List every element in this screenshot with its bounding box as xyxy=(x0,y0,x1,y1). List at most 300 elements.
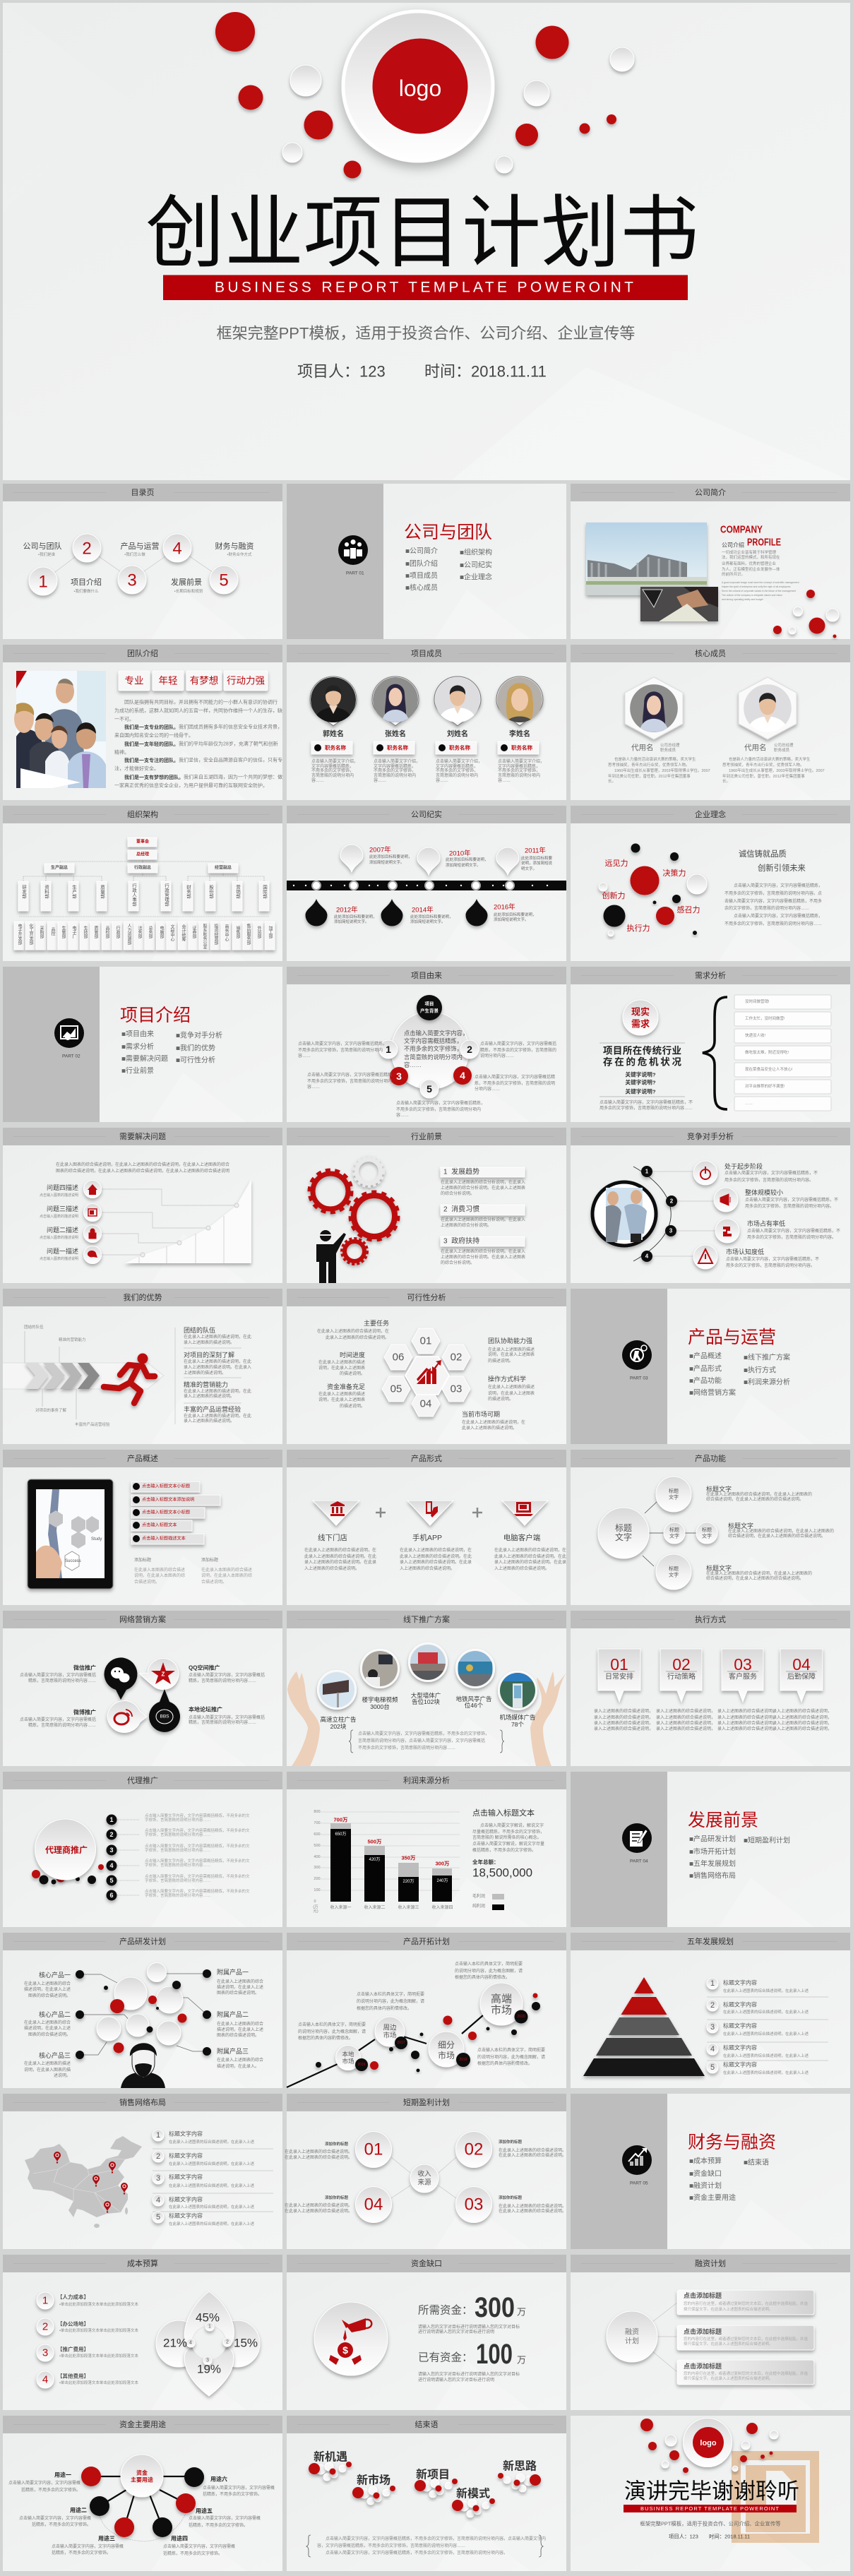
keywords xyxy=(314,2450,537,2500)
panel: agent promotion: 点击输入简要文字内容，文字内容需概括精炼，不用多余的文 xyxy=(145,1843,250,1849)
list bars: 点击输入标题文本 xyxy=(142,1522,177,1528)
panel: agent promotion: 代理推广 xyxy=(127,1775,158,1785)
panel: profit source analysis: 点击输入标题文本 xyxy=(472,1808,535,1818)
descriptions: 点击输入简要文字介绍， xyxy=(436,758,482,764)
badges: 职务名称 xyxy=(325,744,346,751)
photo: hand and tablet xyxy=(640,587,718,621)
panel: main uses of funds: 用途三 xyxy=(98,2535,115,2542)
numbered nodes: 6 xyxy=(109,1892,114,1899)
panel: demand analysis: 关键字说明? xyxy=(625,1079,656,1086)
panel: industry outlook: 上述图表的综合分析说明。在此录入上述图表 xyxy=(441,1254,525,1260)
top boxes xyxy=(44,837,238,873)
panel: project origin: 分项内容…… xyxy=(475,1086,500,1092)
bar chart: 650万 xyxy=(335,1832,347,1837)
top boxes: 行政副总 xyxy=(134,864,151,870)
dots over watermark xyxy=(732,2452,773,2471)
panel: feasibility analysis: 说明，在此录入上述图表 xyxy=(318,1365,365,1371)
panel: product overview xyxy=(3,1450,282,1605)
panel: competitor analysis: 用多余的文字修饰，言简意赅的说明分项内容。 xyxy=(724,1177,813,1183)
panel: feasibility analysis: 团队协助能力强 xyxy=(488,1337,532,1344)
panel: project origin: 点击输入简要文字内容，文字内容需概括精炼 xyxy=(307,1072,392,1078)
panel: part 04 section xyxy=(571,1772,850,1927)
discs: 收入 xyxy=(417,2169,431,2178)
panel: product development plan: 在此录入上述图表的综合 xyxy=(217,2021,263,2027)
panel: industry outlook: 上述图表的综合分析说明。 xyxy=(441,1222,491,1228)
panel: funding gap: 请输入您的文字对目标进行说明请输入您的文字对目标 xyxy=(418,2371,520,2377)
chevrons xyxy=(25,1363,100,1389)
hands xyxy=(287,1671,566,1766)
panel: sales network map xyxy=(3,2094,282,2249)
panel: our advantages: 在此录入上述图表的描述说明，在此 xyxy=(184,1359,251,1364)
list: 标题文字内容 xyxy=(723,2001,757,2008)
panel: company timeline: 此处添加目标和要说明， xyxy=(494,912,537,917)
panel: part 03 section: ■利润来源分析 xyxy=(744,1377,790,1387)
central disc: 计划 xyxy=(625,2336,639,2346)
panel: main uses of funds: 用途二 xyxy=(70,2507,87,2514)
list: 在此录入上述图表的综合描述说明，在此录入上述 xyxy=(169,2161,255,2166)
descriptions: 言简意赅的说明分项内 xyxy=(374,773,416,778)
panel: offline promotion: 言简意赅的说明分项内容，点击输入简要文字内容，文字内容需概括 xyxy=(358,1738,485,1743)
panel: closing remarks: 容，文字内容需概括精炼，不用多余的文字修饰，言简意赅的说明分项内容…… xyxy=(317,2543,465,2548)
panel: company timeline: 此处添加目标和要 xyxy=(521,855,553,861)
panel: project origin: 点击输入简要文字内容，文字内容需概括精炼， xyxy=(298,1041,387,1046)
list: 标题文字内容 xyxy=(169,2130,203,2137)
panel: project origin: 不用多余的文字修饰，言简意赅的说明分项内 xyxy=(396,1107,481,1112)
panel: project origin: 项目 xyxy=(425,1001,434,1007)
sub-department boxes: 会计统筹 xyxy=(181,924,186,941)
panel: agent promotion: 点击输入简要文字内容，文字内容需概括精炼，不用多余的文 xyxy=(145,1827,250,1833)
panel: project origin: 产生背景 xyxy=(420,1007,439,1014)
body text: 来自国内知名安全公司的一线骨干。 xyxy=(114,732,193,739)
sub-department boxes: 生管部 xyxy=(61,925,66,939)
timeline bar xyxy=(287,881,566,890)
panel: industry outlook: 在此录入上述图表的综合分析说明。在此录入 xyxy=(441,1217,525,1222)
demand boxes xyxy=(734,995,831,1111)
nodes xyxy=(76,1969,211,2059)
panel: part 01 section: ■核心成员 xyxy=(405,583,438,592)
keywords: 新模式 xyxy=(456,2487,490,2500)
panel: industry outlook: 的综合分析说明。 xyxy=(441,1260,475,1265)
list: 在此录入上述图表的综合描述说明，在此录入上述 xyxy=(723,2009,809,2015)
panel: short-term profit plan: 添加你的标题 xyxy=(325,2195,348,2200)
panel: our advantages xyxy=(3,1289,282,1444)
panel: competitor analysis: 用多余的文字修饰，言简意赅的说明分项内容。 xyxy=(747,1234,836,1240)
sub-department boxes: 文秘中心 xyxy=(169,924,174,941)
department boxes: 财务部 xyxy=(185,884,191,900)
decorative red and white dots xyxy=(215,12,634,178)
panel: cover slide xyxy=(3,3,850,480)
core member 2 xyxy=(739,677,797,739)
panel: company profile: 公司介绍 xyxy=(722,541,744,548)
discs: 文字 xyxy=(669,1572,679,1578)
panel: corporate philosophy: 点击输入简要文字内容，文字内容需概括精炼， xyxy=(734,913,823,919)
list: 在此录入上述图表的综合描述说明，在此录入上述 xyxy=(723,2070,809,2075)
panel: part 05 section: ■资金主要用途 xyxy=(689,2193,736,2202)
cards: 您的内容打在这里，或者通过复制您的文本后，在此框中选择粘贴，并选 xyxy=(684,2371,809,2376)
panel: feasibility analysis: 04 xyxy=(420,1398,431,1409)
panel: problems to solve: 问题一描述 xyxy=(47,1247,78,1255)
panel: five-year plan: 五年发展规划 xyxy=(687,1936,734,1946)
panel: agent promotion: 点击输入简要文字内容，文字内容需概括精炼，不用多余的文 xyxy=(145,1888,250,1894)
hexagons xyxy=(382,1328,470,1417)
panel: main uses of funds: 用途四 xyxy=(171,2535,188,2542)
numbered list: 2 xyxy=(42,2320,48,2333)
panel: feasibility analysis: 05 xyxy=(390,1383,402,1395)
panel: short-term profit plan: 在此录入上述图表的综合描述说明。 xyxy=(285,2202,352,2208)
panel: product development plan: 描述说明，在此录入上述 xyxy=(24,2025,71,2031)
panel: part 05 section: ■资金缺口 xyxy=(689,2169,722,2178)
top boxes: 经营副总 xyxy=(215,864,232,870)
cards xyxy=(598,1649,823,1702)
list: 在此录入上述图表的综合描述说明，在此录入上述 xyxy=(723,1988,809,1993)
runner xyxy=(104,1356,155,1403)
plus signs xyxy=(376,1508,482,1517)
sub-department boxes: 商务中心 xyxy=(224,924,229,941)
cards: 点击添加标题 xyxy=(684,2291,722,2299)
panel: feasibility analysis xyxy=(287,1289,566,1444)
cards: 您的内容打在这里，或者通过复制您的文本后，在此框中选择粘贴，并选 xyxy=(684,2336,809,2342)
numbered list: 3 xyxy=(42,2347,48,2359)
panel: product development plan: 描述说明，在此录入上述 xyxy=(24,1986,71,1992)
panel: company profile: 公司简介 xyxy=(695,487,726,497)
panel: competitor analysis: 点击输入简要文字内容，文字内容需概括精炼，不 xyxy=(745,1197,838,1203)
central disc xyxy=(35,1819,96,1880)
panel: short-term profit plan: 在此录入上述图表的综合描述说明。 xyxy=(285,2154,352,2160)
body text xyxy=(114,699,282,788)
panel: problems to solve: 在此录入图表的综合描述说明，在此录入上述图表的综合描述说明，在此录入上述图表的综合 xyxy=(56,1162,229,1167)
panel: agent promotion: 字修饰，言简意赅的说明分项内容…… xyxy=(145,1892,211,1898)
panel: contents: 1 xyxy=(38,572,48,592)
panel: execution methods: 录入上述图表的综合描述说明， xyxy=(594,1715,653,1720)
panel: project origin: 点击输入简要文字内容，文字内容需概括 xyxy=(480,1041,556,1046)
panel: competitor analysis: 市场认知度低 xyxy=(726,1248,764,1256)
list: 标题文字内容 xyxy=(723,1979,757,1986)
discs: 来源 xyxy=(417,2179,431,2186)
sub-department boxes: 售后服务部 xyxy=(246,923,251,946)
panel: product forms: 录入上述图表的综合描述说明。在此录 xyxy=(494,1559,566,1565)
panel: agent promotion: 点击输入简要文字内容，文字内容需概括精炼，不用多余的文 xyxy=(145,1858,250,1864)
panel: demand analysis: …… xyxy=(745,1102,753,1106)
panel: company profile: Inspire the spirit of enterprise and unify the style of all employees xyxy=(722,585,791,588)
keywords: 新思路 xyxy=(503,2459,537,2473)
panel: our advantages: 在此录入上述图表的描述说明，在此 xyxy=(184,1334,251,1340)
panel: execution methods: 录入上述图表的综合描述说明， xyxy=(656,1715,715,1720)
sub-department boxes: 电子厂 xyxy=(71,925,76,939)
panel: funding gap xyxy=(287,2255,566,2410)
list: 在此录入上述图表的综合描述说明，在此录入上述 xyxy=(169,2139,255,2145)
panel: corporate philosophy: 余的文字修饰，言简意赅的说明分项内容…… xyxy=(724,905,809,911)
panel: organisation chart: 组织架构 xyxy=(127,809,158,819)
satellites: 2017 xyxy=(397,2041,405,2045)
list: 在此录入上述图表的综合描述说明，在此录入上述 xyxy=(169,2183,255,2188)
panel: main uses of funds: 括精炼，不用多余的文字修饰。 xyxy=(189,2522,248,2528)
panel: corporate philosophy: 点击输入简要文字内容，文字内容需概括精炼， xyxy=(734,883,823,888)
pyramid xyxy=(583,1977,705,2076)
panel: project origin: 不用多余的文字修饰，言简意赅的说明分项内 xyxy=(307,1078,392,1084)
panel: company timeline: 2011年 xyxy=(525,846,546,854)
numbered list: 【推广费用】 xyxy=(57,2346,89,2353)
descriptions: 点击输入简要文字介绍， xyxy=(498,758,544,764)
panel: project origin: 点击输入简要文字内容，文字内容需概括精 xyxy=(475,1074,555,1080)
department boxes: 股份部 xyxy=(208,885,214,900)
panel: contents: 财务与融资 xyxy=(215,541,254,551)
panel: product overview: 合描述说明。 xyxy=(201,1579,227,1585)
panel: execution methods: 录入上述图表的综合描述说明， xyxy=(717,1715,777,1720)
closing title: 演讲完毕谢谢聆听 xyxy=(624,2479,799,2504)
panel: main uses of funds: 点击输入简要文字内容，文字内容需概 xyxy=(189,2515,261,2521)
panel: main uses of funds: 点击输入简要文字内容，文字内容需概 xyxy=(52,2544,124,2549)
panel: company timeline: 此处添加目标和要说明， xyxy=(334,914,377,919)
panel: company timeline: 此处添加目标和要说明， xyxy=(446,857,489,862)
panel: core members: 也是新人力量的活动演讲大赛的策略，奖大学生 xyxy=(614,756,696,762)
petal diagram: 15% xyxy=(234,2336,258,2350)
list: 标题文字内容 xyxy=(169,2196,203,2203)
title: 创业项目计划书 xyxy=(145,189,699,277)
keywords: 新机遇 xyxy=(314,2450,347,2463)
panel: product forms: 此录入上述图表的综合描述说明。在此 xyxy=(494,1554,566,1559)
panel: part 01 section: PART 01 xyxy=(346,571,364,576)
panel: project members: 项目成员 xyxy=(411,649,442,658)
panel: our advantages: 上述图表的描述说明。 xyxy=(184,1370,226,1376)
brace xyxy=(703,997,727,1109)
bar chart: 350万 xyxy=(401,1854,416,1861)
panel: feasibility analysis: 说明，在此录入上述图表 xyxy=(318,1397,365,1402)
headings: 3 政府扶持 xyxy=(443,1236,479,1246)
panel: execution methods: 后勤保障 xyxy=(787,1672,816,1681)
panel: execution methods: 录入上述图表的综合描述说明， xyxy=(594,1720,653,1726)
panel: our advantages: 精准的营销能力 xyxy=(184,1381,228,1388)
panel: execution methods: 录入上述图表的综合描述说明， xyxy=(594,1708,653,1714)
sub-department boxes xyxy=(14,922,275,950)
market discs: 市场 xyxy=(491,2004,512,2017)
panel: demand analysis: 现实 xyxy=(631,1007,650,1017)
discs: 标题 xyxy=(669,1487,679,1494)
department boxes: 质量部 xyxy=(99,884,105,900)
market discs: 市场 xyxy=(383,2031,397,2039)
panel: main uses of funds: 用途一 xyxy=(54,2471,71,2479)
panel: core members: 年到北美公司任职，曾任职。2012年任集团董事 xyxy=(722,773,805,779)
panel: product forms: 电脑客户端 xyxy=(503,1533,541,1542)
panel: feasibility analysis: 主要任务 xyxy=(364,1319,389,1327)
panel: part 02 section: ■需求分析 xyxy=(121,1042,154,1051)
panel: offline promotion: 告位102块 xyxy=(412,1698,440,1705)
panel: main uses of funds: 括精炼，不用多余的文字修饰。 xyxy=(32,2522,91,2527)
market discs: 市场 xyxy=(438,2050,455,2061)
panel: thank-you slide: 项目人：123 xyxy=(669,2534,698,2539)
panel: contents: 产品与运营 xyxy=(120,541,160,551)
petal diagram: 2 xyxy=(226,2340,229,2344)
list: 在此录入上述图表的综合描述说明，在此录入上述 xyxy=(169,2204,255,2210)
panel: demand analysis: 工作太忙，没时间做营! xyxy=(745,1015,785,1021)
petal diagram: 21% xyxy=(163,2336,187,2350)
list: 3 xyxy=(710,2023,715,2032)
panel: short-term profit plan: 短期盈利计划 xyxy=(403,2097,450,2107)
keywords: 新项目 xyxy=(416,2467,450,2481)
panel: corporate philosophy xyxy=(571,806,850,961)
panel: competitor analysis: 处于起步阶段 xyxy=(724,1162,763,1170)
panel: profit source analysis xyxy=(287,1772,566,1927)
discs: 文字 xyxy=(702,1532,712,1539)
panel: feasibility analysis: 此录入上述图表的综合描述说明。 xyxy=(326,1335,389,1340)
panel: core members: 思考领袖奖，青年杰出行业奖，优秀领军人物。 xyxy=(722,762,804,768)
panel: company timeline: 添加简短说明文字。 xyxy=(446,862,481,868)
bar chart: 800 xyxy=(314,1810,321,1814)
panel: short-term profit plan: 在此录入上述图表的综合描述说明。 xyxy=(285,2149,352,2154)
panel: contents: •长期目标和规划 xyxy=(174,588,203,594)
panel: our advantages: 在此录入上述图表的描述说明，在此 xyxy=(184,1413,251,1419)
panel: part 03 section xyxy=(571,1289,850,1444)
panel: company timeline: 添加简短说明文字。 xyxy=(369,859,405,865)
panel: market expansion plan: 点击输入本栏的具体文字，简明扼要 xyxy=(357,1991,424,1997)
panel: execution methods: 客户服务 xyxy=(729,1672,757,1681)
panel: five-year plan xyxy=(571,1933,850,2088)
panel: short-term profit plan: 在此录入上述图表的综合描述说明。 xyxy=(499,2208,566,2214)
panel: profit source analysis: 概括精炼，不用多余的文字修饰。 xyxy=(472,1847,536,1853)
panel: online marketing: 微信推广 xyxy=(73,1664,96,1671)
descriptions: 不用多余的文字修饰， xyxy=(311,768,354,773)
numbered nodes: 2 xyxy=(109,1831,114,1838)
satellites: 2020 xyxy=(517,2015,525,2019)
panel: online marketing xyxy=(3,1611,282,1766)
panel: part 04 section: ■产品研发计划 xyxy=(689,1835,736,1843)
descriptions: 容…… xyxy=(311,777,324,783)
panel: online marketing: 精炼，言简意赅的说明分项内容…… xyxy=(28,1722,96,1728)
nodes: 4 xyxy=(645,1253,649,1260)
panel: main uses of funds: 括精炼，不用多余的文字修饰。 xyxy=(203,2491,262,2497)
numbered list: 【办公场地】 xyxy=(57,2320,89,2327)
panel: competitor analysis: 用多余的文字修饰，言简意赅的说明分项内容。 xyxy=(745,1203,834,1209)
panel: company profile: 业界都有面料。优秀的管理企业 xyxy=(722,561,777,566)
list: 3 xyxy=(156,2174,160,2183)
panel: part 05 section: PART 05 xyxy=(630,2181,648,2186)
panel: contents: 目录页 xyxy=(131,488,154,497)
small dots xyxy=(32,1864,104,1884)
panel: corporate philosophy: 远见力 xyxy=(604,859,628,868)
panel: product overview: 添加标题 xyxy=(134,1557,151,1563)
sub-department boxes: 电脑部 xyxy=(159,925,164,939)
sub-department boxes: 行政部 xyxy=(115,925,120,939)
top boxes: 董事会 xyxy=(136,839,149,845)
badges: 职务名称 xyxy=(387,744,408,751)
panel: feasibility analysis: 06 xyxy=(393,1352,404,1363)
presenter and date: 项目人：123 xyxy=(297,363,386,380)
panel: online marketing: 微博推广 xyxy=(73,1709,96,1716)
panel: problems to solve: 问题二描述 xyxy=(47,1226,78,1234)
cards xyxy=(677,2290,814,2385)
panel: project origin xyxy=(287,967,566,1122)
list: 5 xyxy=(710,2063,715,2072)
panel: feasibility analysis: 03 xyxy=(451,1383,462,1395)
panel: problems to solve: 问题三描述 xyxy=(47,1205,78,1212)
bar chart: 收入来源三 xyxy=(398,1904,419,1910)
central disc: 资金 xyxy=(136,2469,148,2476)
list: 2 xyxy=(710,2001,715,2010)
panel: market expansion plan: 点击输入本栏的具体文字，简明扼要 xyxy=(298,2022,366,2027)
sub-department boxes: 品控 xyxy=(50,927,55,936)
bar chart: 220万 xyxy=(402,1879,414,1884)
bar chart: 收入来源四 xyxy=(431,1904,453,1910)
panel: agent promotion: 字修饰，言简意赅的说明分项内容…… xyxy=(145,1847,211,1853)
panel: product forms: 入上述图表的综合描述说明。 xyxy=(494,1566,549,1571)
panel: competitor analysis: 竞争对手分析 xyxy=(687,1131,734,1141)
department boxes: 营销部 xyxy=(234,884,241,900)
panel: industry outlook: 上述图表的综合分析说明。在此录入上述图表 xyxy=(441,1185,525,1191)
panel: corporate philosophy: 企业理念 xyxy=(695,809,726,819)
discs xyxy=(356,2131,491,2223)
panel: product development plan: 核心产品二 xyxy=(39,2010,71,2018)
panel: our advantages: 对项目的深刻了解 xyxy=(184,1351,234,1359)
panel: offline promotion: 202块 xyxy=(330,1723,347,1730)
panel: project origin: 炼，不用多余的文字修饰，言简意赅的说明 xyxy=(475,1080,555,1086)
central disc xyxy=(121,2455,163,2497)
panel: agent promotion: 字修饰，言简意赅的说明分项内容…… xyxy=(145,1862,211,1868)
panel: project origin: 容…… xyxy=(404,1061,422,1068)
member 4 xyxy=(496,676,543,726)
panel: our advantages: 精准的营销能力 xyxy=(59,1337,86,1342)
panel: product overview: 添加标题 xyxy=(201,1557,218,1563)
list: 标题文字内容 xyxy=(723,2044,757,2051)
panel: product development plan: 核心产品三 xyxy=(39,2051,71,2059)
headings: 1 发展趋势 xyxy=(443,1167,479,1176)
bar chart: 700 xyxy=(314,1821,321,1825)
list: 标题文字内容 xyxy=(169,2212,203,2219)
legend: 毛利润 xyxy=(472,1893,485,1899)
panel: industry outlook: 行业前景 xyxy=(411,1131,442,1141)
panel: product development plan: 述说明。 xyxy=(54,2073,71,2078)
panel: funding gap: 资金缺口 xyxy=(411,2258,442,2268)
triangles xyxy=(313,1501,548,1525)
panel: execution methods: 01 xyxy=(610,1655,628,1674)
number nodes: 3 xyxy=(396,1071,402,1082)
icons xyxy=(330,1501,533,1517)
panel: offline promotion: 位46个 xyxy=(465,1702,484,1709)
numbered list: 【其他费用】 xyxy=(57,2373,89,2380)
panel: product functions: 在此录入上述图表的综合描述说明，在此录入上述图表的 xyxy=(706,1570,812,1576)
names: 刘姓名 xyxy=(447,729,468,739)
department boxes: 国际部 xyxy=(261,885,268,900)
descriptions: 不用多余的文字修饰， xyxy=(374,768,416,773)
panel: project origin: 文字内容需概括精炼， xyxy=(404,1037,463,1044)
panel: company profile: PROFILE xyxy=(747,537,781,548)
panel: competitor analysis: 点击输入简要文字内容，文字内容需概括精炼，不 xyxy=(747,1228,840,1234)
panel: product development plan: 附属产品三 xyxy=(217,2047,249,2055)
panel: main uses of funds: 点击输入简要文字内容，文字内容需概 xyxy=(19,2515,91,2521)
numbered list: 4 xyxy=(42,2374,48,2385)
sub-department boxes: 股东账务公室 xyxy=(202,924,207,949)
badges: 职务名称 xyxy=(449,744,470,751)
panel: market expansion plan: 产品开拓计划 xyxy=(403,1936,450,1946)
panel: market expansion plan: 点击输入本栏的具体文字，简明扼要 xyxy=(455,1961,523,1967)
descriptions: 文字内容需概括精炼， xyxy=(374,763,416,769)
panel: online marketing: 点击输入简要文字内容，文字内容需概括 xyxy=(189,1715,265,1720)
panel: product forms: 在此录入上述图表的综合描述说明，在 xyxy=(494,1547,566,1553)
panel: short-term profit plan xyxy=(285,2094,566,2249)
panel: product forms: 产品形式 xyxy=(411,1453,442,1463)
panel: part 04 section: ■短期盈利计划 xyxy=(744,1836,790,1844)
sub-department boxes: 生技部 xyxy=(83,925,88,939)
list bars: 点击输入标题文本小标题 xyxy=(142,1483,190,1489)
panel: main uses of funds: 资金主要用途 xyxy=(119,2419,166,2429)
panel: demand analysis: 做吃饭太难，附近没得吃! xyxy=(745,1049,789,1055)
panel: part 03 section: ■线下推广方案 xyxy=(744,1353,790,1361)
body text: 精神。 xyxy=(114,749,129,756)
icons in bubbles: BBS xyxy=(160,1715,169,1719)
icon: bearded man xyxy=(121,2043,165,2088)
descriptions: 容…… xyxy=(374,777,386,783)
department boxes: 研发部 xyxy=(21,885,27,900)
panel: contents: 4 xyxy=(172,539,182,558)
logo disc and dots xyxy=(640,2418,778,2473)
